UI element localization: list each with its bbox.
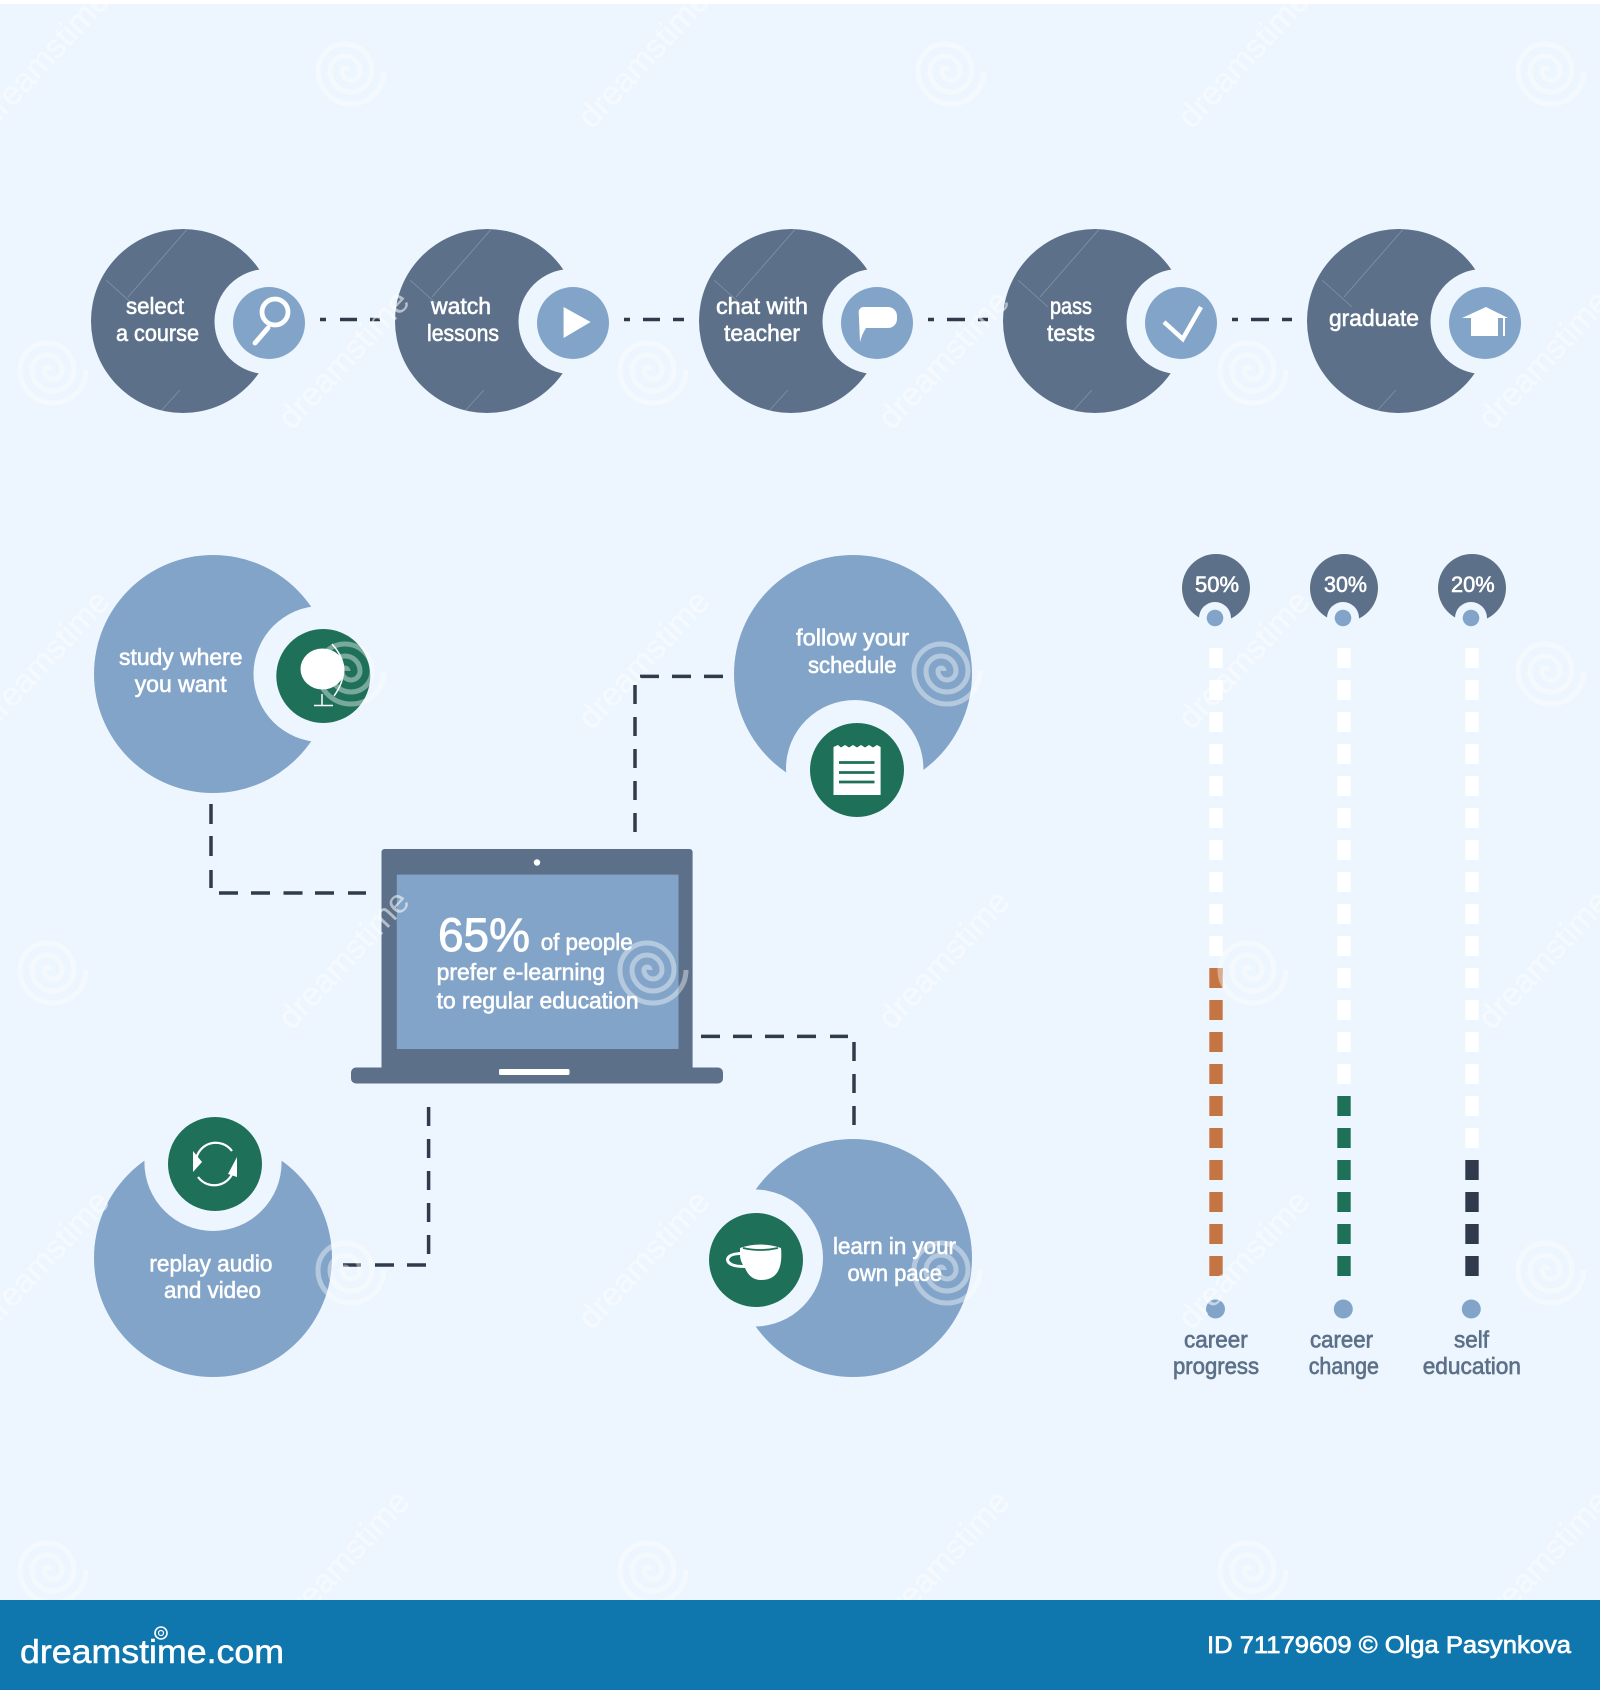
step: chat with teacher: [699, 229, 928, 413]
statistic text: of people: [541, 929, 633, 955]
step: watch lessons: lessons: [427, 320, 499, 346]
diagonal watermark text: dreamstime: [270, 1483, 416, 1636]
icon: speech bubble: [859, 307, 897, 342]
icon: refresh arrows: [193, 1143, 237, 1185]
step: pass tests: pass: [1050, 293, 1092, 319]
bar chart column: self education 20%: [1423, 554, 1521, 1379]
footer logo: dreamstime.com: [20, 1633, 284, 1670]
step: graduate: graduate: [1329, 305, 1419, 331]
bar chart column: career progress 50%: 50%: [1195, 572, 1239, 597]
diagonal watermark text: dreamstime: [570, 1183, 716, 1336]
step: pass tests: tests: [1047, 320, 1095, 346]
panel: replay audio and video: replay audio: [149, 1251, 272, 1277]
statistic text: to regular education: [437, 988, 639, 1014]
bar chart column: career change 30%: change: [1309, 1353, 1379, 1379]
diagonal watermark text: dreamstime: [870, 1483, 1016, 1636]
icon: graduation cap: [1462, 307, 1508, 336]
diagonal watermark text: dreamstime: [570, 583, 716, 736]
panel: learn in your own pace: own pace: [848, 1260, 942, 1286]
statistic text: prefer e-learning: [437, 959, 605, 985]
panel: study where you want: [94, 555, 390, 793]
statistic text: [437, 908, 639, 1014]
bar chart column: career change 30%: 30%: [1324, 572, 1367, 597]
step: chat with teacher: teacher: [724, 320, 800, 346]
panel: follow your schedule: schedule: [808, 652, 896, 678]
bar chart column: career change 30%: [1309, 554, 1379, 1379]
panel: follow your schedule: follow your: [796, 625, 909, 651]
step: graduate: [1307, 229, 1536, 413]
bar chart column: self education 20%: education: [1423, 1353, 1521, 1379]
step: watch lessons: [395, 229, 624, 413]
panel: follow your schedule: [734, 555, 972, 837]
icon: check mark: [1164, 307, 1201, 339]
diagonal watermark text: dreamstime: [1170, 583, 1316, 736]
diagonal watermark text: dreamstime: [870, 883, 1016, 1036]
icon: notepad: [834, 745, 881, 795]
diagonal watermark text: dreamstime: [1170, 1183, 1316, 1336]
step: select a course: [91, 229, 320, 413]
footer credit: ID 71179609 © Olga Pasynkova: [1207, 1632, 1572, 1659]
bar chart column: career progress 50%: progress: [1173, 1353, 1259, 1379]
diagonal watermark text: dreamstime: [270, 883, 416, 1036]
bar chart column: career progress 50%: career: [1184, 1326, 1248, 1352]
icon: cup: [726, 1244, 781, 1280]
bar chart column: career change 30%: career: [1310, 1326, 1373, 1352]
panel: learn in your own pace: learn in your: [833, 1233, 956, 1259]
connectors between steps: [320, 318, 1292, 321]
dashed connectors around laptop: [211, 676, 854, 1265]
icon: play: [564, 307, 591, 338]
icon: globe: [300, 644, 344, 706]
diagonal watermark text: dreamstime: [270, 283, 416, 436]
step: select a course: select: [126, 293, 185, 319]
bar chart column: self education 20%: 20%: [1451, 572, 1495, 597]
panel: replay audio and video: and video: [164, 1277, 261, 1303]
statistic text: 65%: [438, 908, 530, 961]
bar chart column: self education 20%: self: [1454, 1326, 1490, 1352]
panel: replay audio and video: [94, 1094, 332, 1377]
step: pass tests: [1003, 229, 1232, 413]
step: watch lessons: watch: [430, 293, 491, 319]
bar chart column: career progress 50%: [1173, 554, 1259, 1379]
icon: magnifier: [255, 299, 288, 343]
panel: study where you want: study where: [119, 644, 242, 670]
diagonal watermark text: dreamstime: [870, 283, 1016, 436]
step: select a course: a course: [116, 320, 199, 346]
laptop with statistic: [351, 849, 723, 1084]
panel: study where you want: you want: [135, 671, 227, 697]
footer band: [0, 1600, 1600, 1690]
step: chat with teacher: chat with: [716, 293, 808, 319]
panel: learn in your own pace: [686, 1139, 972, 1377]
